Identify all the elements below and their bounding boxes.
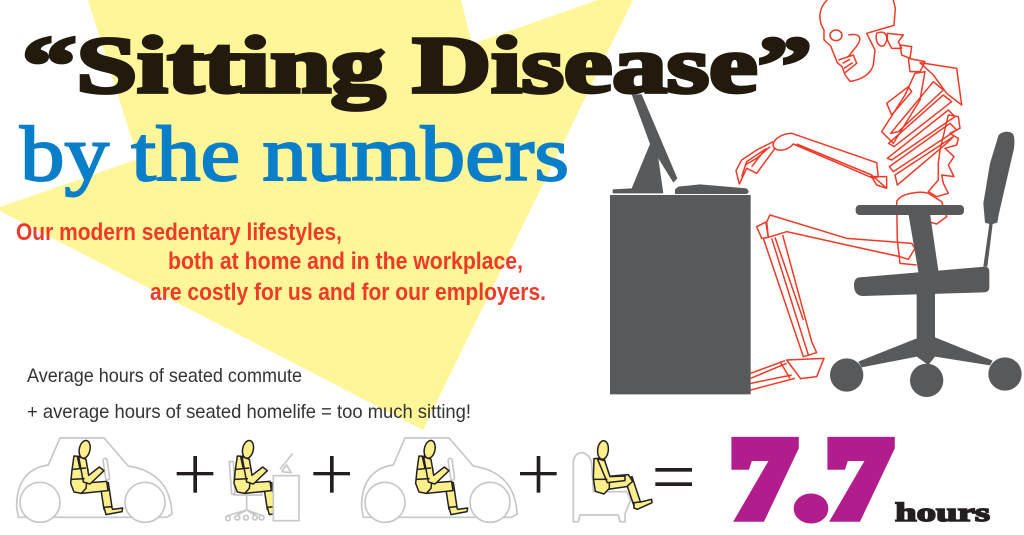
icon: car commute home xyxy=(362,438,517,522)
plus sign xyxy=(313,456,350,493)
icon: sofa at home xyxy=(573,440,652,522)
keyboard xyxy=(675,184,749,194)
background burst xyxy=(0,0,633,430)
equation caption xyxy=(27,365,471,423)
desk xyxy=(610,195,751,394)
intro text: are costly for us and for our employers. xyxy=(150,279,546,306)
intro text: both at home and in the workplace, xyxy=(168,248,523,275)
icon: car commute xyxy=(17,438,172,522)
intro text xyxy=(16,219,546,306)
intro text: Our modern sedentary lifestyles, xyxy=(16,219,342,246)
subtitle: by the numbers xyxy=(20,110,569,197)
monitor xyxy=(613,94,677,193)
title: “Sitting Disease” xyxy=(22,22,812,110)
plus sign xyxy=(177,456,213,493)
skeleton xyxy=(736,0,962,390)
equation caption: + average hours of seated homelife = too much sitting! xyxy=(27,401,471,423)
hours unit: hours xyxy=(895,498,990,527)
equals sign xyxy=(655,468,692,486)
equation icons xyxy=(17,438,517,522)
icon: desk work xyxy=(226,439,299,521)
illustration: skeleton at desk xyxy=(610,0,1022,397)
plus sign xyxy=(520,456,557,493)
equation caption: Average hours of seated commute xyxy=(27,365,302,387)
office chair xyxy=(830,132,1022,397)
